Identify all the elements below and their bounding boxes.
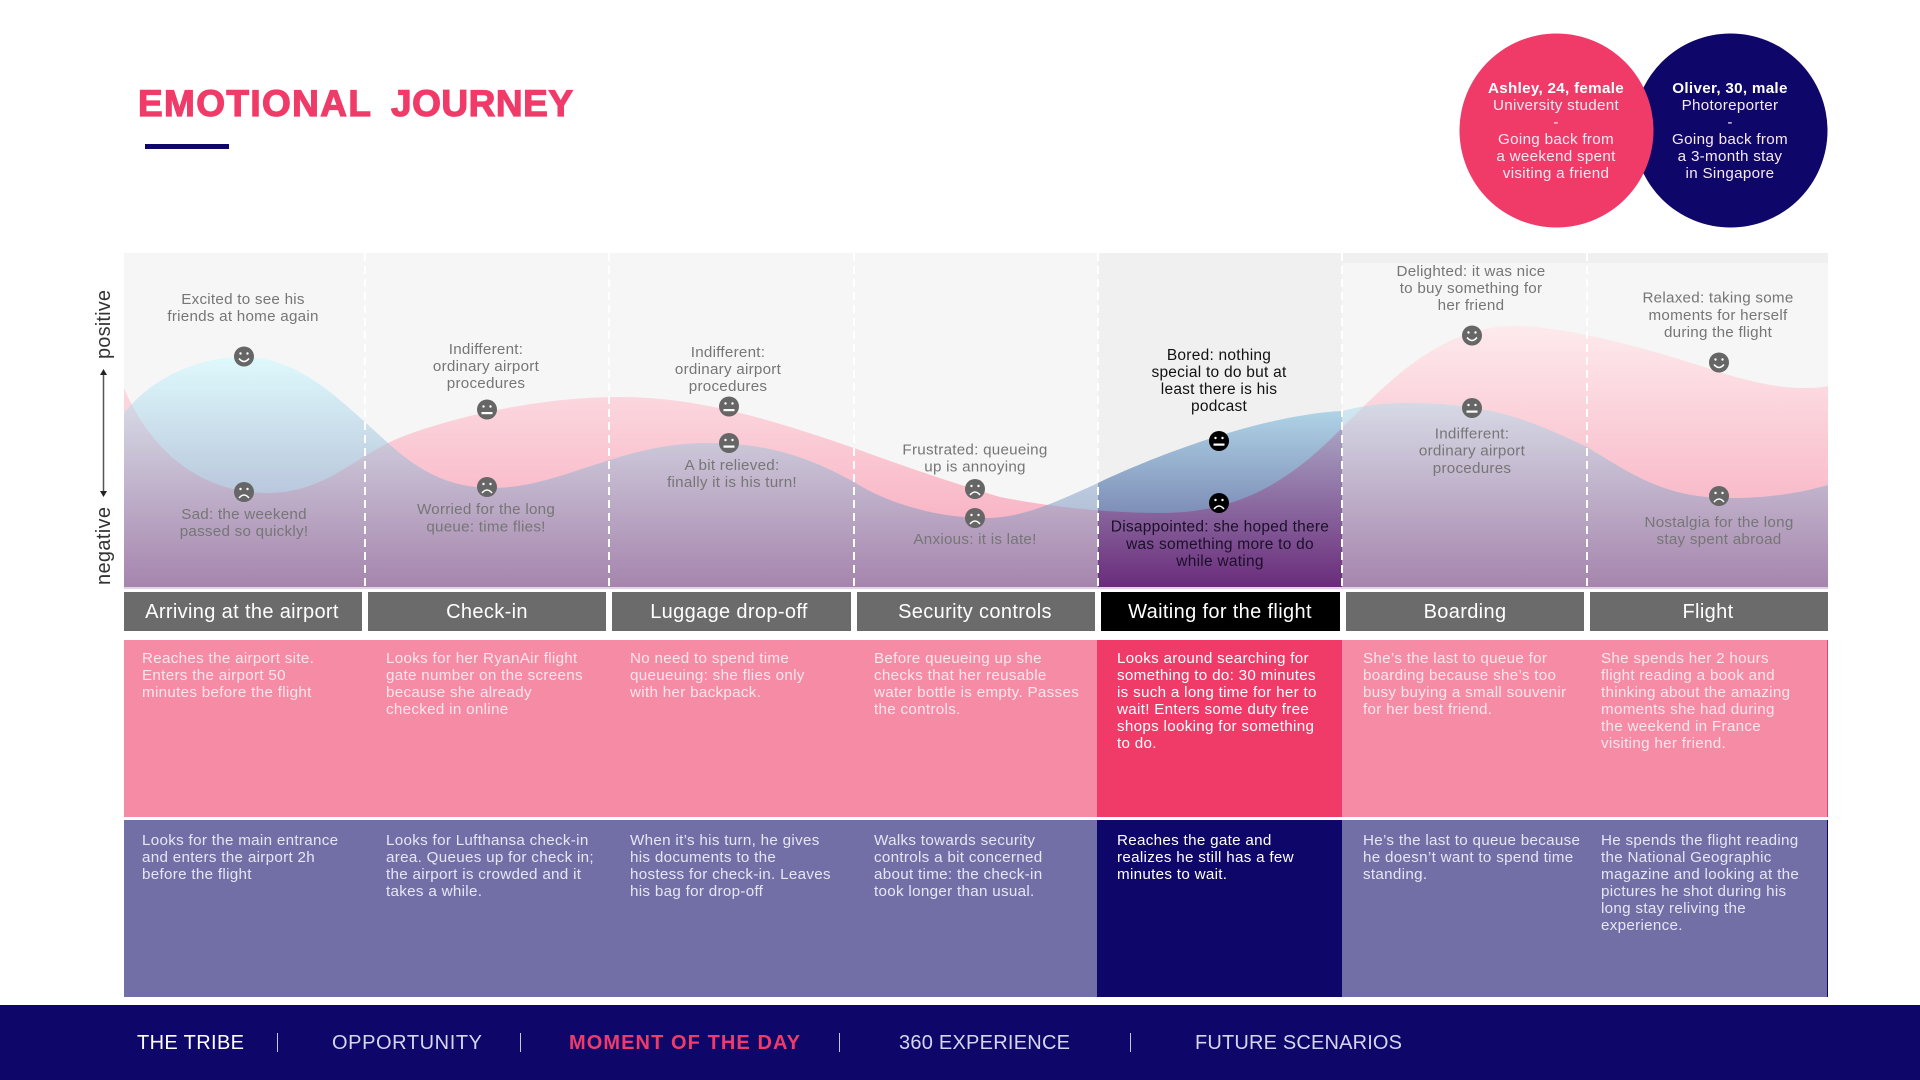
footer navigation: FUTURE SCENARIOS <box>1195 1032 1402 1054</box>
text: Ashley waiting: Looks around searching for <box>1117 650 1309 667</box>
text: Ashley arriving: Enters the airport 50 <box>142 667 286 684</box>
label: indifferent check-in: procedures <box>447 375 525 392</box>
text: Ashley arriving: minutes before the flight <box>142 684 312 701</box>
label: delighted: to buy something for <box>1400 280 1542 297</box>
text: Oliver arriving: before the flight <box>142 866 252 883</box>
text: Oliver flight: pictures he shot during his <box>1601 883 1786 900</box>
axis: emotion scale: positive <box>93 290 115 359</box>
text: Oliver boarding: He’s the last to queue because <box>1363 832 1580 849</box>
text: Oliver check-in: takes a while. <box>386 883 482 900</box>
icon: sad face, security upper <box>965 479 985 499</box>
text: Oliver security: took longer than usual. <box>874 883 1035 900</box>
text: Ashley arriving <box>142 650 314 701</box>
icon: sad face, waiting <box>1209 493 1229 513</box>
text: Oliver waiting <box>1117 832 1294 883</box>
text: Oliver boarding <box>1363 832 1580 883</box>
text: Ashley luggage <box>629 650 805 701</box>
icon: happy face, arriving <box>234 346 254 366</box>
label: sad <box>180 506 308 540</box>
stage: check-in <box>368 592 606 631</box>
title: EMOTIONAL <box>138 83 371 124</box>
text: Oliver check-in: area. Queues up for check in; <box>386 849 594 866</box>
label: excited <box>167 291 319 325</box>
label: nostalgia: stay spent abroad <box>1656 531 1782 548</box>
icon: neutral face, luggage lower <box>719 433 739 453</box>
persona: Oliver: Oliver, 30, male <box>1672 80 1788 97</box>
label: excited: friends at home again <box>167 308 319 325</box>
text: Ashley boarding <box>1363 650 1566 718</box>
text: Oliver luggage: When it’s his turn, he gives <box>630 832 820 849</box>
label: nostalgia <box>1644 514 1794 548</box>
text: Ashley boarding: She’s the last to queue for <box>1363 650 1547 667</box>
text: Ashley flight <box>1601 650 1790 752</box>
persona: Oliver: Going back from <box>1672 131 1788 148</box>
label: anxious: Anxious: it is late! <box>913 531 1037 548</box>
stage: arriving: Arriving at the airport <box>145 601 339 623</box>
label: worried: queue: time flies! <box>426 518 546 536</box>
text: Ashley boarding: busy buying a small souvenir <box>1363 684 1566 701</box>
stage: arriving <box>124 592 362 631</box>
text: Oliver security <box>874 832 1042 900</box>
label: indifferent boarding <box>1419 426 1526 477</box>
text: Ashley check-in: Looks for her RyanAir flight <box>386 650 578 667</box>
text: Oliver check-in <box>386 832 594 900</box>
text: Ashley luggage: No need to spend time <box>630 650 789 667</box>
label: relieved: A bit relieved: <box>685 457 779 474</box>
stage: boarding <box>1346 592 1584 631</box>
persona: Oliver: - <box>1727 114 1733 131</box>
label: relaxed: during the flight <box>1664 324 1773 341</box>
persona: Oliver: a 3-month stay <box>1678 148 1782 165</box>
text: Ashley security: the controls. <box>874 701 961 718</box>
label: nostalgia: Nostalgia for the long <box>1644 514 1794 531</box>
label: worried: Worried for the long <box>417 501 555 518</box>
text: Ashley boarding: boarding because she’s too <box>1363 667 1556 684</box>
label: relaxed: moments for herself <box>1649 307 1788 324</box>
text: Ashley waiting: shops looking for something <box>1117 718 1314 735</box>
icon: sad face, security lower <box>965 508 985 528</box>
text: Oliver security: Walks towards security <box>874 832 1035 849</box>
stage: security: Security controls <box>898 601 1052 623</box>
label: bored: special to do but at <box>1151 364 1287 381</box>
text: Oliver boarding: he doesn’t want to spend time <box>1363 849 1573 866</box>
label: delighted: her friend <box>1438 297 1504 314</box>
panel: Oliver actions <box>124 820 1828 997</box>
label: bored <box>1151 347 1287 415</box>
label: indifferent check-in: Indifferent: <box>449 341 523 358</box>
label: indifferent luggage: ordinary airport <box>675 361 782 378</box>
stage: waiting: Waiting for the flight <box>1128 601 1312 623</box>
persona: Oliver <box>1634 34 1828 228</box>
text: Ashley waiting: wait! Enters some duty free <box>1116 701 1309 718</box>
text: Ashley flight: She spends her 2 hours <box>1601 650 1769 667</box>
text: Oliver luggage: hostess for check-in. Leaves <box>630 866 831 883</box>
text: Oliver flight: magazine and looking at the <box>1601 866 1799 883</box>
stage: check-in: Check-in <box>446 601 528 623</box>
text: Ashley flight: flight reading a book and <box>1601 667 1775 684</box>
persona: Ashley: Going back from <box>1498 131 1614 148</box>
persona: Oliver: Photoreporter <box>1682 97 1778 114</box>
text: Ashley check-in: because she already <box>386 684 532 701</box>
text: Oliver flight <box>1601 832 1799 934</box>
label: relaxed: Relaxed: taking some <box>1642 290 1794 306</box>
icon: sad face, check-in <box>477 477 497 497</box>
text: Ashley check-in: checked in online <box>386 701 508 718</box>
text: Ashley security: Before queueing up she <box>874 650 1042 667</box>
journey stage bars <box>124 592 1828 631</box>
label: indifferent boarding: procedures <box>1433 460 1511 477</box>
text: Oliver flight: experience. <box>1601 917 1683 934</box>
stage: luggage: Luggage drop-off <box>650 601 808 623</box>
text: Ashley flight: thinking about the amazing <box>1601 684 1790 701</box>
icon: sad face, flight <box>1709 486 1729 506</box>
text: Ashley waiting: is such a long time for her to <box>1117 684 1317 701</box>
label: frustrated <box>902 442 1048 476</box>
title underline <box>145 144 229 149</box>
persona: Oliver: in Singapore <box>1686 165 1774 182</box>
icon: happy face, flight <box>1709 352 1729 372</box>
stage: security <box>857 592 1095 631</box>
label: disappointed: was something more to do <box>1125 536 1314 553</box>
text: Oliver luggage <box>630 832 831 900</box>
label: bored: least there is his <box>1161 381 1277 398</box>
label: sad: Sad: the weekend <box>181 506 307 523</box>
icon: neutral face, luggage upper <box>719 396 739 416</box>
label: relieved: finally it is his turn! <box>667 474 797 491</box>
footer navigation: MOMENT OF THE DAY <box>569 1032 801 1054</box>
text: Ashley flight: moments she had during <box>1601 701 1775 718</box>
persona: Ashley: a weekend spent <box>1496 148 1616 165</box>
icon: neutral face, check-in <box>477 400 497 420</box>
text: Ashley flight: the weekend in France <box>1601 718 1761 735</box>
text: Oliver luggage: his bag for drop-off <box>630 883 764 900</box>
label: disappointed: while wating <box>1175 553 1264 570</box>
icon: neutral face, waiting <box>1209 431 1229 451</box>
persona: Ashley: Ashley, 24, female <box>1488 80 1624 97</box>
label: disappointed: Disappointed: she hoped there <box>1111 518 1329 536</box>
text: Oliver arriving <box>142 832 338 883</box>
footer navigation: 360 EXPERIENCE <box>899 1032 1070 1054</box>
label: indifferent boarding: ordinary airport <box>1419 442 1526 460</box>
text: Oliver waiting: Reaches the gate and <box>1117 832 1272 849</box>
text: Oliver waiting: minutes to wait. <box>1117 866 1227 883</box>
label: disappointed <box>1111 518 1329 570</box>
text: Ashley arriving: Reaches the airport site. <box>142 650 314 667</box>
label: delighted <box>1396 263 1546 314</box>
text: Oliver boarding: standing. <box>1363 866 1427 883</box>
stage: boarding: Boarding <box>1424 601 1506 623</box>
text: Oliver check-in: Looks for Lufthansa check-in <box>386 832 589 849</box>
text: Oliver flight: long stay reliving the <box>1601 900 1746 917</box>
label: indifferent luggage: procedures <box>689 378 767 395</box>
label: indifferent luggage: Indifferent: <box>691 344 765 361</box>
label: indifferent check-in: ordinary airport <box>433 358 540 375</box>
text: Ashley security <box>873 650 1079 718</box>
footer navigation <box>0 1005 1920 1080</box>
text: Oliver arriving: and enters the airport 2h <box>142 849 315 866</box>
label: relieved <box>667 457 797 491</box>
panel: Ashley actions <box>124 640 1828 817</box>
footer navigation: OPPORTUNITY <box>332 1032 482 1054</box>
icon: happy face, boarding <box>1462 326 1482 346</box>
text: Oliver check-in: the airport is crowded and it <box>386 866 582 883</box>
persona: Ashley: visiting a friend <box>1503 165 1609 182</box>
stage: flight: Flight <box>1682 601 1734 623</box>
label: bored: podcast <box>1191 398 1247 415</box>
text: Ashley waiting: to do. <box>1117 735 1157 752</box>
footer navigation: THE TRIBE <box>137 1032 244 1054</box>
text: Ashley luggage: with her backpack. <box>629 684 761 701</box>
text: Ashley security: water bottle is empty. Passes <box>873 684 1079 701</box>
text: Ashley security: checks that her reusable <box>874 667 1047 684</box>
axis: emotion scale <box>93 290 115 585</box>
label: excited: Excited to see his <box>181 291 305 308</box>
label: frustrated: up is annoying <box>924 458 1026 476</box>
text: Oliver flight: the National Geographic <box>1601 849 1772 866</box>
persona: Ashley: University student <box>1493 97 1620 114</box>
text: Oliver security: about time: the check-in <box>874 866 1042 883</box>
title: JOURNEY <box>391 83 573 124</box>
persona: Ashley <box>1460 34 1654 228</box>
label: indifferent boarding: Indifferent: <box>1435 426 1509 442</box>
text: Oliver waiting: realizes he still has a few <box>1117 849 1294 866</box>
icon: sad face, arriving <box>234 482 254 502</box>
text: Ashley boarding: for her best friend. <box>1363 701 1492 718</box>
text: Oliver arriving: Looks for the main entrance <box>142 832 338 849</box>
label: indifferent luggage <box>675 344 782 395</box>
label: relaxed <box>1642 290 1794 341</box>
label: worried <box>417 501 555 536</box>
text: Ashley check-in: gate number on the screens <box>386 667 583 684</box>
text: Oliver luggage: his documents to the <box>630 849 776 866</box>
label: indifferent check-in <box>433 341 540 392</box>
title <box>138 83 573 124</box>
text: Oliver security: controls a bit concerned <box>874 849 1042 866</box>
stage: flight <box>1590 592 1828 631</box>
text: Ashley waiting: something to do: 30 minutes <box>1117 667 1316 684</box>
stage: waiting <box>1101 592 1340 631</box>
persona: Ashley: - <box>1553 114 1559 131</box>
label: delighted: Delighted: it was nice <box>1396 263 1546 280</box>
text: Ashley flight: visiting her friend. <box>1601 735 1726 752</box>
label: frustrated: Frustrated: queueing <box>902 442 1048 458</box>
text: Oliver flight: He spends the flight reading <box>1601 832 1799 849</box>
stage: luggage <box>612 592 851 631</box>
icon: neutral face, boarding <box>1462 398 1482 418</box>
text: Ashley waiting <box>1116 650 1317 752</box>
text: Ashley check-in <box>386 650 583 718</box>
text: Ashley luggage: queueuing: she flies only <box>630 667 805 684</box>
axis: emotion scale: negative <box>93 507 115 585</box>
emotion curve chart <box>124 253 1828 589</box>
label: sad: passed so quickly! <box>180 523 308 540</box>
label: bored: Bored: nothing <box>1167 347 1271 364</box>
